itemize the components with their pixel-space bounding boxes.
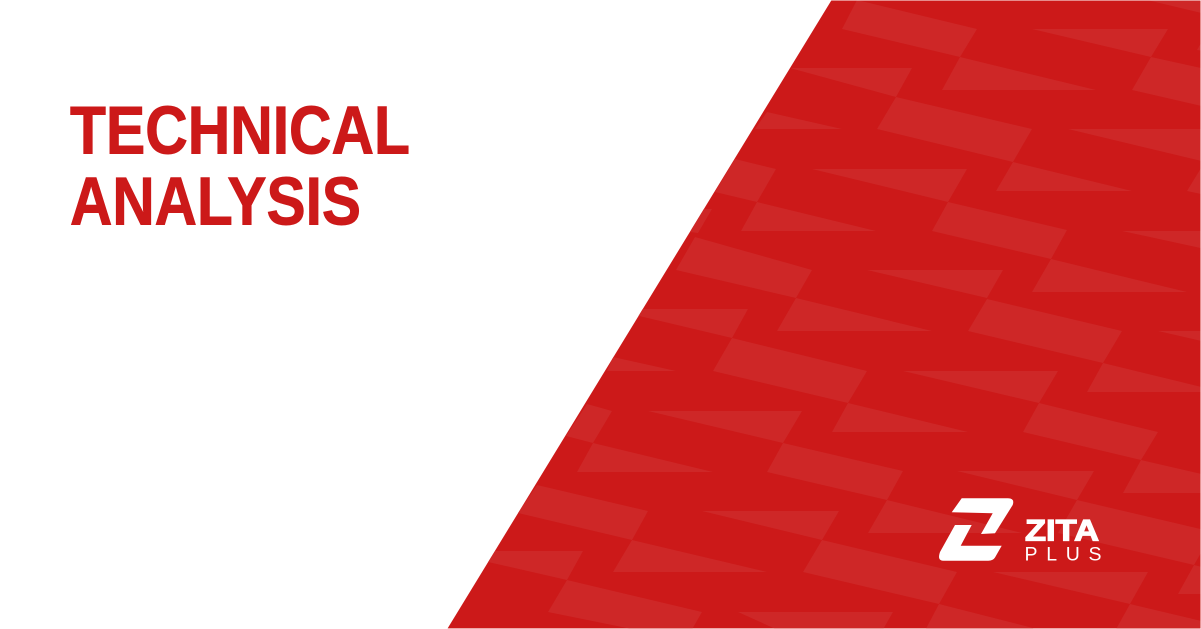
background pattern: lighter parallelograms — [488, 0, 1201, 629]
title — [70, 94, 410, 240]
title line 1: TECHNICAL — [70, 94, 410, 169]
title line 2: ANALYSIS — [70, 165, 361, 240]
icon: Z mark — [939, 498, 1013, 561]
logo wordmark PLUS: PLUS — [1024, 544, 1102, 566]
logo: Zita Plus — [939, 498, 1102, 566]
logo wordmark ZITA: ZITA — [1025, 515, 1099, 548]
panel: red slanted background with pattern — [440, 0, 1201, 629]
